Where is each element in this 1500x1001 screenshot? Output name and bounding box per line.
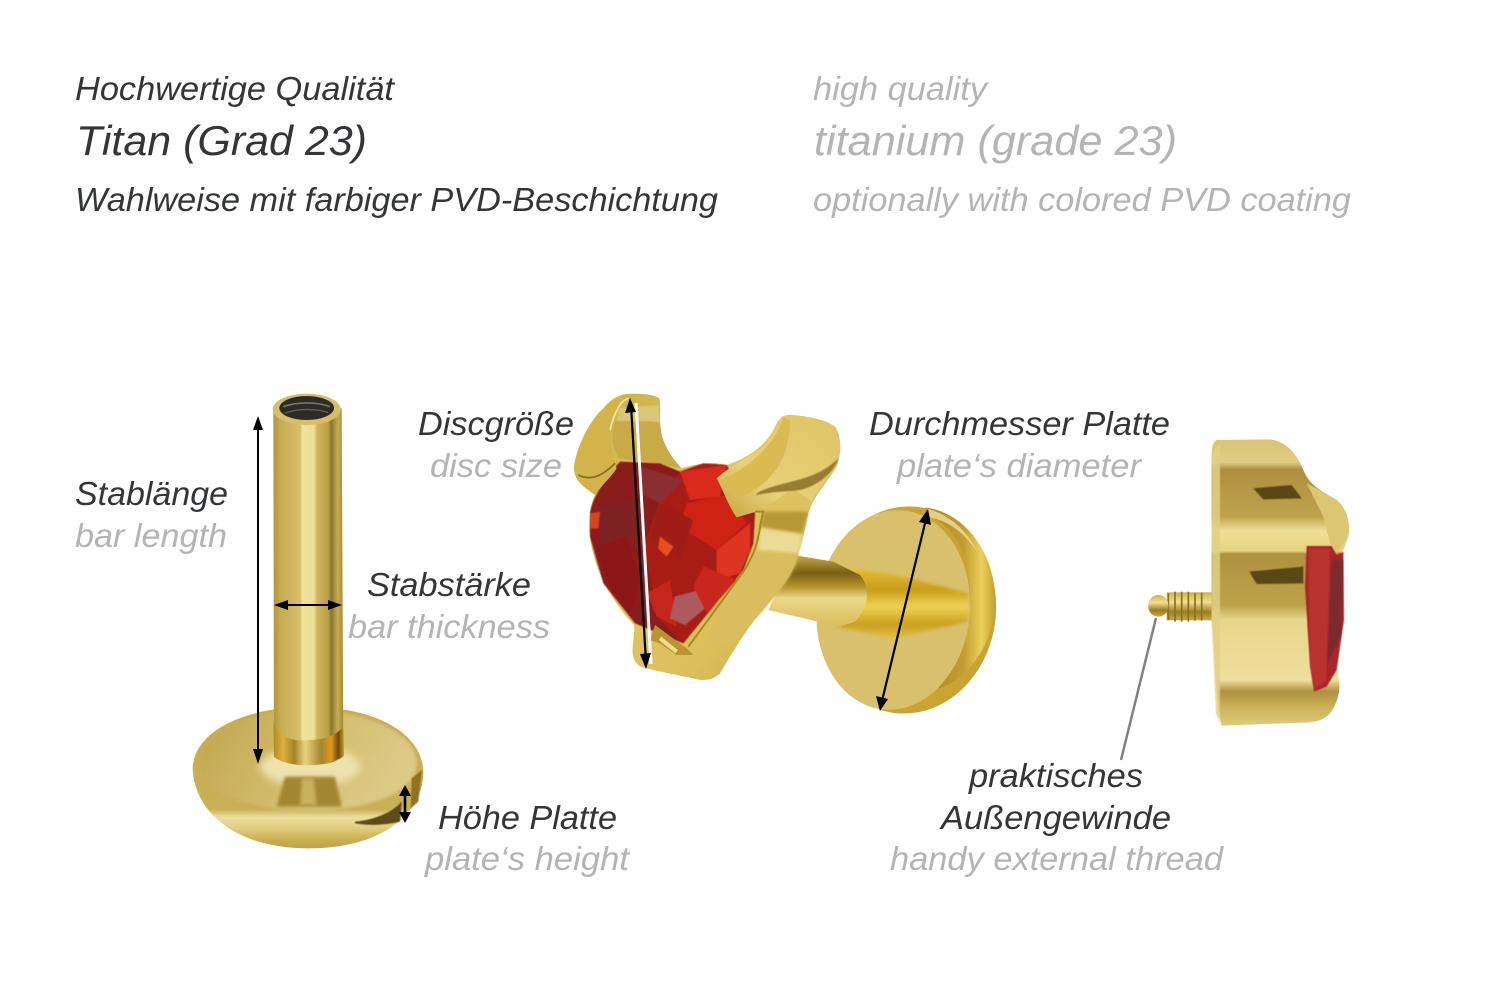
bar stem [273,408,344,765]
label: external thread [890,757,1225,877]
internal thread opening [273,394,341,425]
bar between plate and heart [768,555,968,638]
label: bar length: Stablänge [75,475,228,512]
side gem [1305,546,1344,692]
label: external thread: handy external thread [890,840,1225,877]
label: disc size: disc size [430,447,562,484]
gold prongs [574,394,840,655]
header: German text [75,70,719,218]
arrow: disc size [625,398,651,669]
header: English text: optionally with colored PVD coating [813,181,1352,218]
label: bar thickness: bar thickness [348,608,550,645]
red heart gem [590,462,755,643]
label: plate diameter [869,405,1170,484]
label: plate diameter: Durchmesser Platte [869,405,1170,442]
arrow: bar thickness [274,600,342,610]
label: external thread: Außengewinde [939,799,1171,836]
back plate [807,498,1006,722]
label: plate height [424,799,631,877]
side body [1212,439,1349,726]
label: disc size: Discgröße [418,405,574,442]
header: German text: Hochwertige Qualität [75,70,396,107]
product: heart top with plate [574,394,1006,722]
leader line: thread [1121,618,1156,760]
disc base [193,708,423,848]
arrow: plate diameter [876,509,931,711]
external thread pin [1148,592,1212,622]
arrow: bar length [253,416,263,764]
label: bar thickness: Stabstärke [367,566,531,603]
label: plate diameter: plate‘s diameter [896,447,1143,484]
label: plate height: plate‘s height [424,840,631,877]
label: bar length [75,475,228,554]
label: external thread: praktisches [968,757,1143,794]
header: German text: Wahlweise mit farbiger PVD-Beschichtung [75,181,719,218]
label: bar length: bar length [75,517,227,554]
arrow: plate height [399,785,411,823]
header: German text: Titan (Grad 23) [76,117,367,164]
product: labret bar with disc [193,394,423,848]
label: plate height: Höhe Platte [438,799,617,836]
header: English text: titanium (grade 23) [814,117,1177,164]
label: bar thickness [348,566,550,645]
header: English text [813,70,1352,218]
product: heart top side view with thread [1148,439,1349,726]
header: English text: high quality [813,70,990,107]
gold heart setting [574,394,840,680]
label: disc size [418,405,574,484]
